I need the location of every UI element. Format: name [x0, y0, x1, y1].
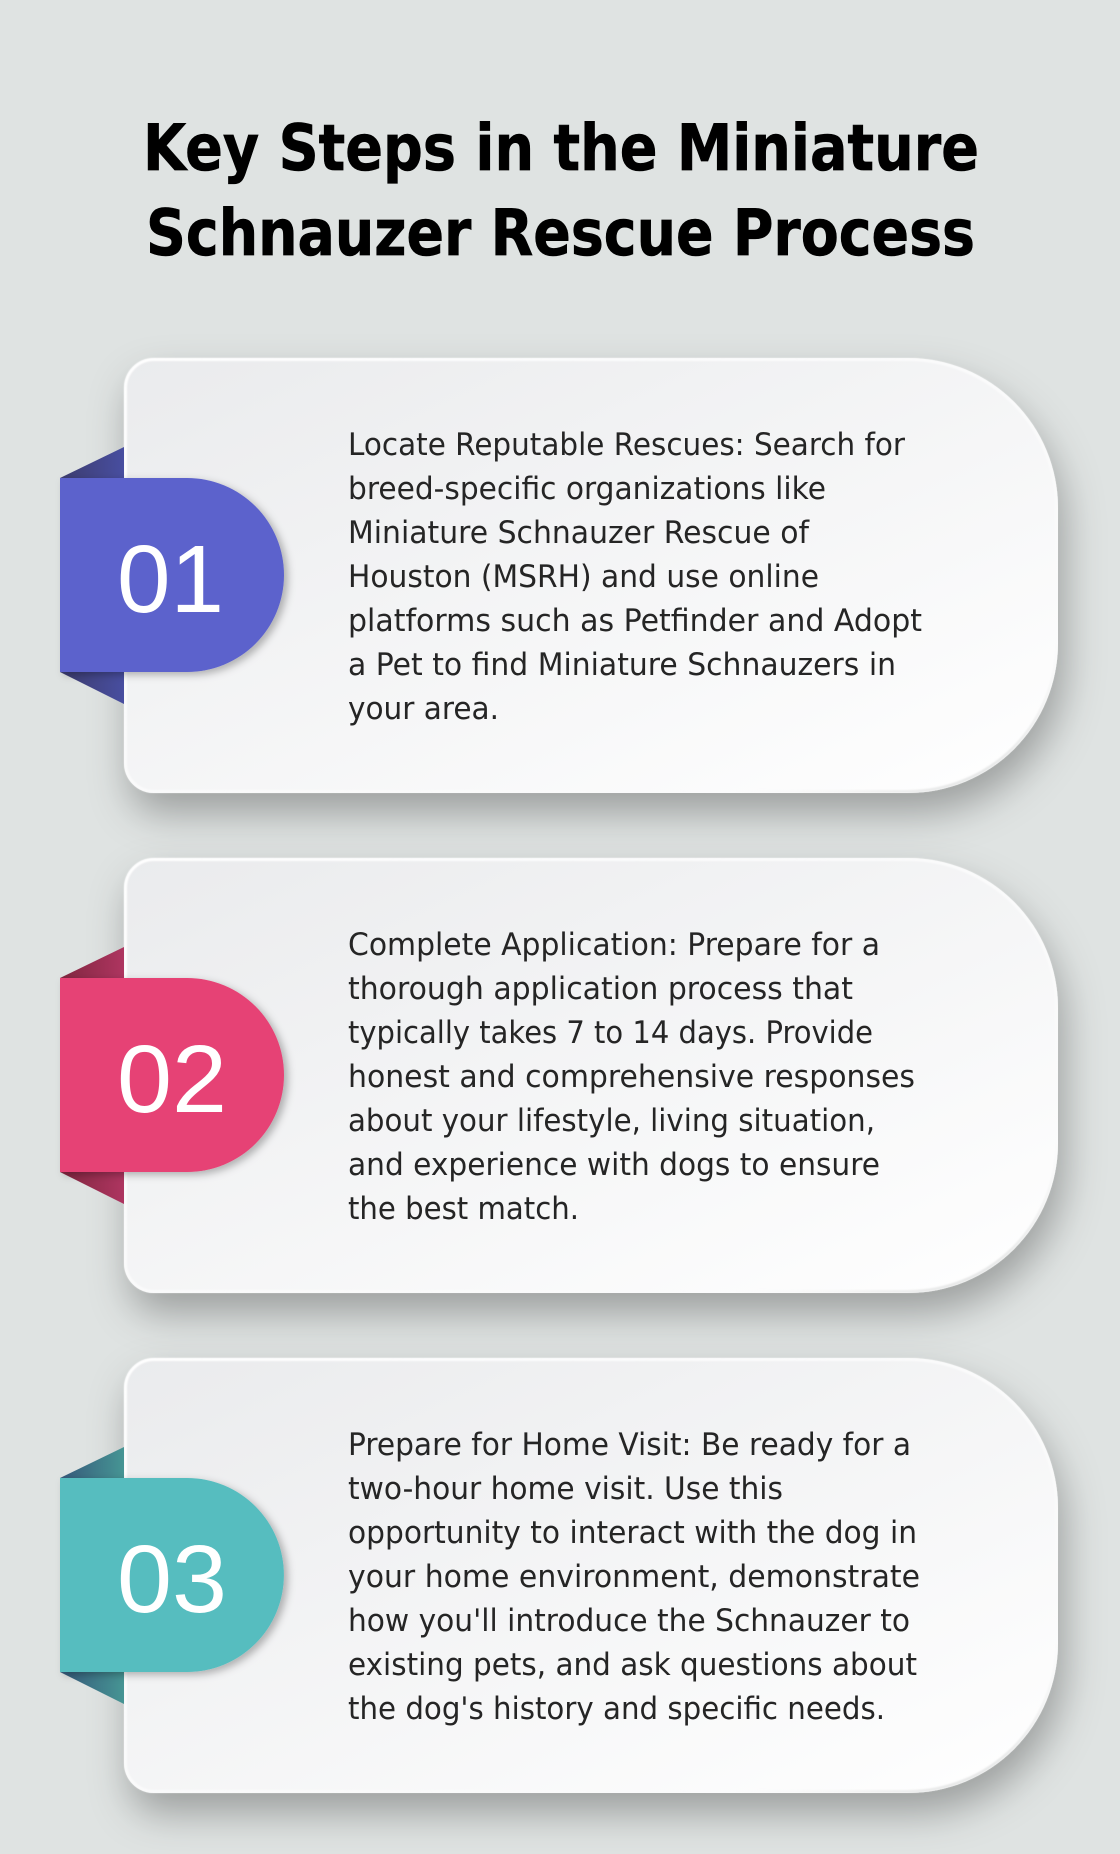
card: step 1	[124, 358, 1058, 793]
card: step 2	[124, 858, 1058, 1293]
text block: step 1: platforms such as Petfinder and Adopt	[348, 603, 922, 639]
text block: step 1: breed-specific organizations like	[348, 471, 826, 507]
number badge: step 2	[60, 978, 284, 1172]
text block: step 2: typically takes 7 to 14 days. Provide	[348, 1015, 873, 1051]
title	[143, 112, 979, 271]
text block: step 2: and experience with dogs to ensure	[348, 1147, 880, 1183]
text block: step 3	[348, 1427, 920, 1727]
card edge highlight: step 1	[126, 360, 1056, 792]
number: 02: 02	[117, 1026, 227, 1133]
text block: step 1: Miniature Schnauzer Rescue of	[348, 515, 810, 551]
number: 01: 01	[117, 526, 224, 633]
title: Schnauzer Rescue Process	[146, 197, 975, 271]
text block: step 1: your area.	[348, 691, 499, 727]
panel: step 2	[60, 858, 1058, 1293]
card: step 3	[124, 1358, 1058, 1793]
text block: step 3: how you'll introduce the Schnauzer to	[348, 1603, 910, 1639]
ribbon fold bottom: step 2	[60, 1172, 124, 1204]
card edge highlight: step 2	[126, 860, 1056, 1292]
number badge: step 1	[60, 478, 284, 672]
panel: step 1	[60, 358, 1058, 793]
number badge: step 3	[60, 1478, 284, 1672]
ribbon fold bottom: step 1	[60, 672, 124, 704]
text block: step 1	[348, 427, 922, 727]
text block: step 2: about your lifestyle, living situation,	[348, 1103, 875, 1139]
number: 03: 03	[117, 1526, 227, 1633]
ribbon fold bottom: step 3	[60, 1672, 124, 1704]
ribbon fold top: step 1	[60, 447, 124, 478]
card edge highlight: step 3	[126, 1360, 1056, 1792]
text block: step 3: your home environment, demonstrate	[348, 1559, 920, 1595]
ribbon fold top: step 2	[60, 947, 124, 978]
ribbon fold top: step 3	[60, 1447, 124, 1478]
text block: step 1: Locate Reputable Rescues: Search for	[348, 427, 905, 463]
text block: step 3: two-hour home visit. Use this	[348, 1471, 783, 1507]
text block: step 1: Houston (MSRH) and use online	[348, 559, 819, 595]
text block: step 1: a Pet to find Miniature Schnauzers in	[348, 647, 896, 683]
text block: step 3: opportunity to interact with the dog in	[348, 1515, 917, 1551]
text block: step 3: Prepare for Home Visit: Be ready for a	[348, 1427, 911, 1463]
text block: step 2: honest and comprehensive responses	[348, 1059, 915, 1095]
text block: step 2: Complete Application: Prepare for a	[348, 927, 880, 963]
text block: step 2: thorough application process that	[348, 971, 853, 1007]
text block: step 3: existing pets, and ask questions about	[348, 1647, 917, 1683]
panel: step 3	[60, 1358, 1058, 1793]
title: Key Steps in the Miniature	[143, 112, 979, 186]
text block: step 3: the dog's history and specific needs.	[348, 1691, 885, 1727]
text block: step 2	[348, 927, 915, 1227]
text block: step 2: the best match.	[348, 1191, 579, 1227]
